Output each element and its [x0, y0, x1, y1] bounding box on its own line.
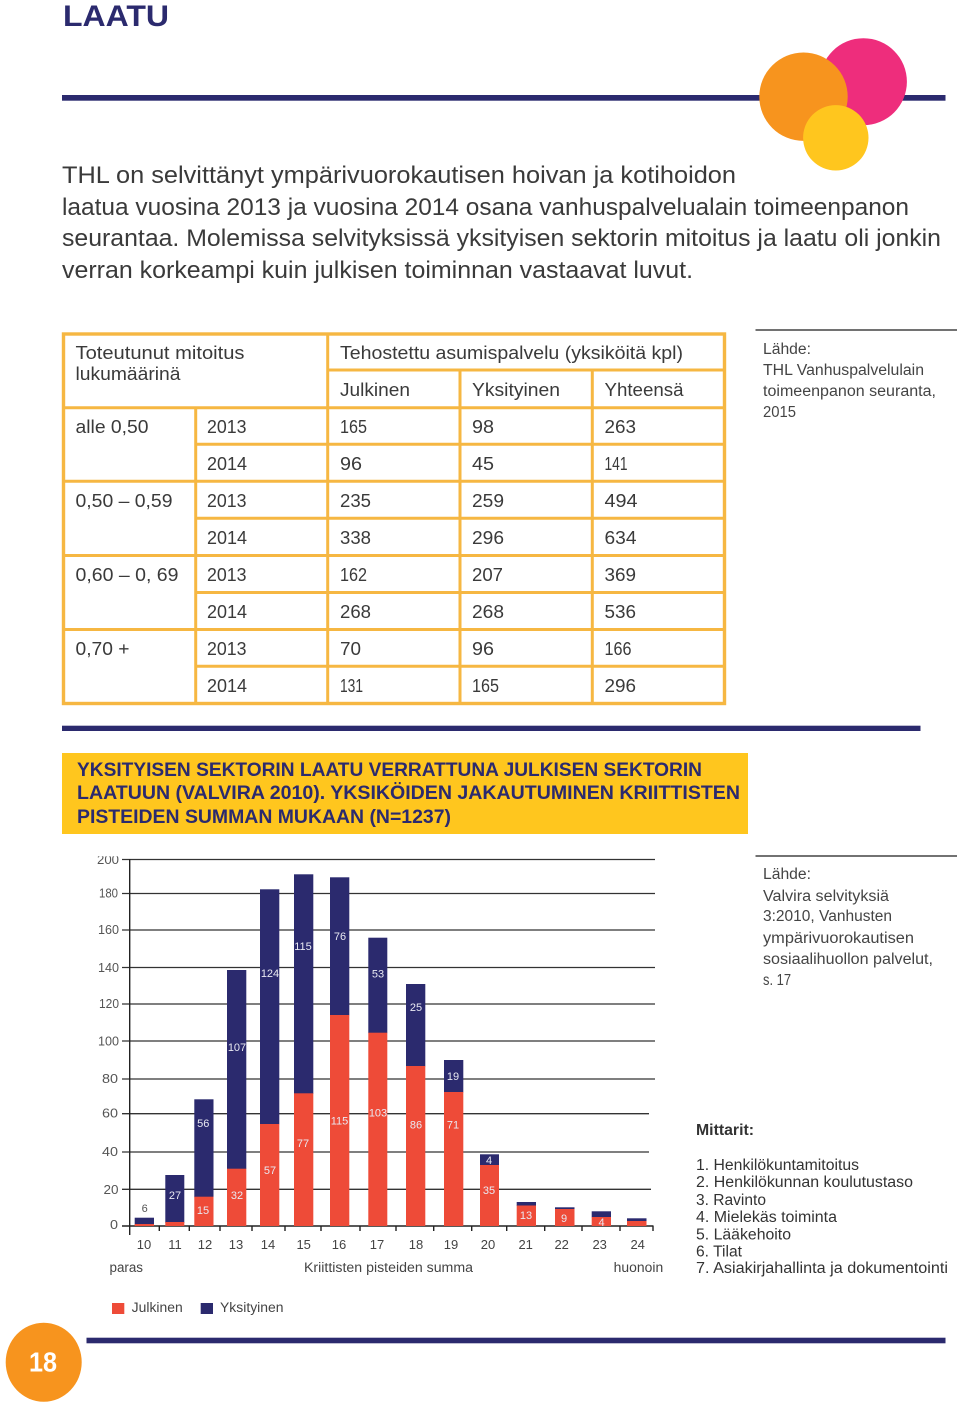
table row labels: [76, 417, 178, 659]
x axis labels: [137, 1237, 645, 1252]
source note: THL: 2015: [763, 404, 796, 421]
bottom rule: [86, 1338, 946, 1343]
table column: yksityinen: 165: [472, 676, 499, 696]
y axis labels: 80: [102, 1071, 118, 1086]
table years: 2014: [207, 676, 247, 696]
table header: Toteutunut mitoitus: [76, 343, 244, 363]
x axis title: [110, 1260, 663, 1275]
source note: Valvira: 3:2010, Vanhusten: [763, 908, 892, 925]
table column: yhteensä: 536: [604, 602, 636, 622]
intro paragraph: verran korkeampi kuin julkisen toiminnan vastaavat luvut.: [62, 257, 693, 284]
x axis labels: 24: [630, 1237, 645, 1252]
y axis labels: [97, 852, 119, 1232]
table column: julkinen: 338: [340, 528, 371, 548]
bar value labels: 57: [264, 1165, 276, 1177]
y axis labels: 180: [99, 886, 118, 900]
bar value labels: 56: [197, 1118, 209, 1130]
source note: THL: toimeenpanon seuranta,: [763, 383, 936, 400]
x axis labels: 12: [198, 1237, 212, 1252]
table years: 2014: [207, 454, 247, 474]
source note: Valvira: s. 17: [763, 972, 791, 989]
mittarit list: 2. Henkilökunnan koulutustaso: [696, 1174, 913, 1191]
table column: julkinen: 165: [340, 417, 367, 437]
bar value labels: 103: [369, 1108, 387, 1120]
source note: Valvira: Lähde:: [763, 866, 811, 883]
bar value labels: 76: [334, 931, 346, 943]
page number badge: 18: [29, 1347, 57, 1378]
bar value labels: 4: [486, 1155, 492, 1167]
legend: [112, 1300, 284, 1315]
bar value labels: 107: [228, 1042, 246, 1054]
chart heading: PISTEIDEN SUMMAN MUKAAN (N=1237): [77, 806, 451, 828]
source note: THL: [756, 330, 957, 421]
y axis labels: 200: [97, 852, 119, 867]
table column: julkinen: 131: [340, 676, 363, 696]
x axis labels: 22: [554, 1237, 569, 1252]
table header: Julkinen: [340, 380, 410, 400]
bar value labels: 27: [169, 1190, 181, 1202]
table years: 2013: [207, 417, 246, 437]
bar value labels: 9: [561, 1213, 567, 1225]
x axis labels: 13: [229, 1237, 243, 1252]
source note: THL: Lähde:: [763, 341, 811, 358]
x axis labels: 23: [592, 1237, 607, 1252]
chart heading: [62, 753, 748, 834]
mittarit list: 4. Mielekäs toiminta: [696, 1209, 837, 1226]
bar value labels: 32: [231, 1190, 243, 1202]
bar value labels: 71: [447, 1120, 459, 1132]
table column: yhteensä: 494: [604, 491, 638, 511]
bar value labels: 124: [261, 968, 279, 980]
x axis labels: 10: [137, 1237, 151, 1252]
bar value labels: 13: [520, 1210, 532, 1222]
table years: 2014: [207, 528, 247, 548]
table column: yksityinen: 98: [472, 417, 494, 437]
y axis labels: 140: [98, 960, 119, 975]
decorative circles: [759, 38, 907, 170]
table row labels: alle 0,50: [76, 417, 148, 437]
table column: yksityinen: 296: [472, 528, 504, 548]
x axis title: Kriittisten pisteiden summa: [304, 1260, 474, 1275]
source note: THL: THL Vanhuspalvelulain: [763, 362, 924, 379]
table years: 2013: [207, 639, 246, 659]
bar value labels: [142, 931, 605, 1229]
bars: yksityinen (navy): [135, 874, 646, 1225]
source note: Valvira: [756, 856, 957, 989]
source note: Valvira: sosiaalihuollon palvelut,: [763, 951, 933, 968]
bar value labels: 115: [294, 941, 312, 953]
table column: yhteensä: 634: [604, 528, 636, 548]
chart heading: YKSITYISEN SEKTORIN LAATU VERRATTUNA JULKISEN SEKTORIN: [77, 759, 702, 781]
table years: 2014: [207, 602, 247, 622]
table years: 2013: [207, 491, 246, 511]
y axis labels: 0: [110, 1217, 118, 1232]
table column: julkinen: [340, 417, 371, 696]
x axis title: paras: [110, 1260, 143, 1275]
intro paragraph: THL on selvittänyt ympärivuorokautisen hoivan ja kotihoidon: [62, 162, 736, 189]
table: mitoitus: [63, 334, 725, 704]
intro paragraph: seurantaa. Molemissa selvityksissä yksityisen sektorin mitoitus ja laatu oli jonkin: [62, 225, 941, 252]
mittarit list: [696, 1122, 948, 1277]
table column: yhteensä: 296: [604, 676, 636, 696]
middle rule: [62, 726, 920, 731]
bar value labels: 53: [372, 968, 384, 980]
table column: julkinen: 70: [340, 639, 361, 659]
table column: yksityinen: 268: [472, 602, 504, 622]
table column: yhteensä: 369: [604, 565, 636, 585]
x axis labels: 15: [296, 1237, 311, 1252]
bar value labels: 15: [197, 1205, 209, 1217]
table header: lukumäärinä: [76, 364, 182, 384]
bar value labels: 25: [410, 1002, 422, 1014]
table column: yksityinen: 207: [472, 565, 503, 585]
x axis labels: 21: [518, 1237, 533, 1252]
table row labels: 0,70 +: [76, 639, 130, 659]
mittarit list: 5. Lääkehoito: [696, 1226, 791, 1244]
table column: yksityinen: 45: [472, 454, 494, 474]
table column: yhteensä: 141: [604, 454, 628, 474]
mittarit list: 3. Ravinto: [696, 1192, 766, 1209]
top rule: [62, 95, 946, 101]
intro paragraph: laatua vuosina 2013 ja vuosina 2014 osana vanhuspalvelualain toimeenpanon: [62, 194, 909, 221]
table header: Yhteensä: [604, 380, 685, 400]
y axis labels: 100: [98, 1034, 119, 1048]
stacked bar chart: [90, 845, 663, 1275]
table column: julkinen: 96: [340, 454, 362, 474]
x axis labels: 16: [332, 1237, 346, 1252]
bar value labels: 19: [447, 1071, 459, 1083]
legend: Julkinen: [132, 1300, 183, 1315]
bar value labels: 86: [410, 1120, 422, 1132]
mittarit list: 7. Asiakirjahallinta ja dokumentointi: [696, 1260, 948, 1277]
title: LAATU: [63, 0, 169, 33]
table row labels: 0,60 – 0, 69: [76, 565, 178, 585]
table header: [76, 343, 685, 400]
intro paragraph: [62, 162, 941, 284]
y axis labels: 120: [99, 996, 119, 1011]
table column: julkinen: 162: [340, 565, 367, 585]
bar value labels: 35: [483, 1185, 495, 1197]
bars: julkinen (red): [135, 1015, 646, 1226]
x axis labels: 14: [261, 1237, 275, 1252]
bar value labels: 115: [331, 1116, 348, 1128]
table column: yhteensä: 263: [604, 417, 636, 437]
x axis labels: 11: [168, 1237, 182, 1252]
x axis labels: 20: [481, 1237, 495, 1252]
bar value labels: 77: [297, 1138, 309, 1150]
x axis labels: 19: [444, 1237, 458, 1252]
x axis labels: 18: [409, 1237, 423, 1252]
x axis labels: 17: [370, 1237, 384, 1252]
mittarit list: Mittarit:: [696, 1122, 754, 1139]
y axis labels: 20: [104, 1182, 118, 1197]
mittarit list: 6. Tilat: [696, 1244, 743, 1260]
table column: julkinen: 268: [340, 602, 371, 622]
mittarit list: 1. Henkilökuntamitoitus: [696, 1157, 859, 1174]
table years: [207, 417, 247, 696]
table column: yhteensä: [604, 417, 638, 696]
y axis labels: 160: [98, 922, 119, 937]
chart heading: LAATUUN (VALVIRA 2010). YKSIKÖIDEN JAKAUTUMINEN KRIITTISTEN: [77, 781, 740, 804]
x axis title: huonoin: [614, 1260, 663, 1275]
bar value labels: 4: [598, 1217, 605, 1229]
legend: Yksityinen: [220, 1300, 284, 1315]
table grid: [63, 334, 725, 704]
source note: Valvira: Valvira selvityksiä: [763, 888, 889, 905]
table column: yksityinen: [472, 417, 504, 696]
table column: julkinen: 235: [340, 491, 371, 511]
bar value labels: 6: [142, 1203, 148, 1215]
table column: yhteensä: 166: [604, 639, 632, 659]
table header: Tehostettu asumispalvelu (yksiköitä kpl): [340, 343, 683, 363]
table years: 2013: [207, 565, 246, 585]
table column: yksityinen: 96: [472, 639, 494, 659]
table header: Yksityinen: [472, 380, 560, 400]
table column: yksityinen: 259: [472, 491, 504, 511]
source note: Valvira: ympärivuorokautisen: [763, 930, 914, 947]
page number badge: [6, 1323, 82, 1402]
y axis labels: 40: [102, 1144, 118, 1159]
y axis labels: 60: [102, 1106, 118, 1121]
table row labels: 0,50 – 0,59: [76, 491, 172, 511]
